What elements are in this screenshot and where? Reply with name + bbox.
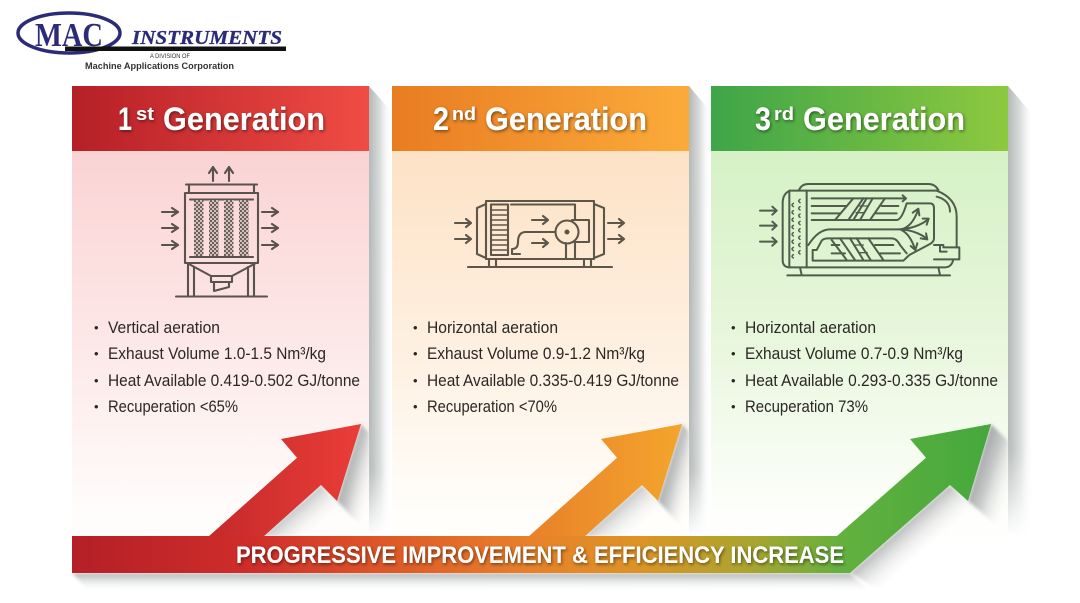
bullet list: Recuperation <65% [108,398,238,416]
bullet list: • [94,373,99,388]
heading: Generation [163,101,325,137]
improvement bar and 3rd generation arrow [72,424,991,573]
bullet list: Exhaust Volume 0.9-1.2 Nm³/kg [427,345,645,363]
bullet list [731,319,998,416]
logo division line: A DIVISION OF [150,54,190,60]
header band [392,86,689,151]
arrow shadows [263,424,1008,590]
bullet list: Vertical aeration [108,319,220,337]
logo rule [65,46,286,51]
shadow fade at panel bottoms [369,450,1038,536]
heading: 1 [118,101,132,137]
bullet list: • [413,373,418,388]
heading: st [136,104,154,124]
bullet list [413,319,679,416]
bullet list: Recuperation 73% [745,398,868,416]
bullet list: • [413,320,418,335]
bullet list: • [731,320,736,335]
bullet list: • [731,373,736,388]
bullet list: • [94,399,99,414]
bullet list [94,319,360,416]
bullet list: Heat Available 0.335-0.419 GJ/tonne [427,372,679,390]
bullet list: • [413,346,418,361]
bullet list: Heat Available 0.419-0.502 GJ/tonne [108,372,360,390]
icon: vertical aeration cooler [162,167,278,296]
arrow: 2nd generation [528,424,682,537]
panel shadow [689,86,711,535]
panel shadow [369,86,392,535]
panel shadow [1008,86,1034,535]
panel body [72,151,369,536]
bullet list: Exhaust Volume 0.7-0.9 Nm³/kg [745,345,963,363]
logo ellipse [18,13,120,53]
logo wordmark MAC: MAC [35,17,103,54]
icon: advanced cross-bar cooler [760,184,959,275]
heading: Generation [485,101,647,137]
heading: 2 [433,101,449,137]
bullet list: • [94,346,99,361]
heading: nd [452,104,476,124]
panel: 3rd generation [711,86,1034,536]
bullet list: • [731,346,736,361]
bar shadow [72,573,868,592]
logo: MAC Instruments [18,13,286,72]
panel: 1st generation [72,86,392,536]
panel: 2nd generation [392,86,711,536]
bullet list: • [94,320,99,335]
icon: horizontal aeration cooler [455,201,624,267]
header band [711,86,1008,151]
bullet list: Horizontal aeration [745,319,876,337]
bullet list: Horizontal aeration [427,319,558,337]
panel body [711,151,1008,536]
arrow: 1st generation [208,424,361,537]
logo wordmark INSTRUMENTS: INSTRUMENTS [131,27,282,49]
header band [72,86,369,151]
bar label: PROGRESSIVE IMPROVEMENT & EFFICIENCY INCREASE [236,542,844,569]
bullet list: • [413,399,418,414]
bullet list: Exhaust Volume 1.0-1.5 Nm³/kg [108,345,326,363]
logo company name: Machine Applications Corporation [85,61,234,72]
heading: rd [774,104,794,124]
bullet list: Heat Available 0.293-0.335 GJ/tonne [745,372,998,390]
heading: Generation [803,101,965,137]
bullet list: • [731,399,736,414]
panel body [392,151,689,536]
bullet list: Recuperation <70% [427,398,557,416]
heading: 3 [755,101,771,137]
